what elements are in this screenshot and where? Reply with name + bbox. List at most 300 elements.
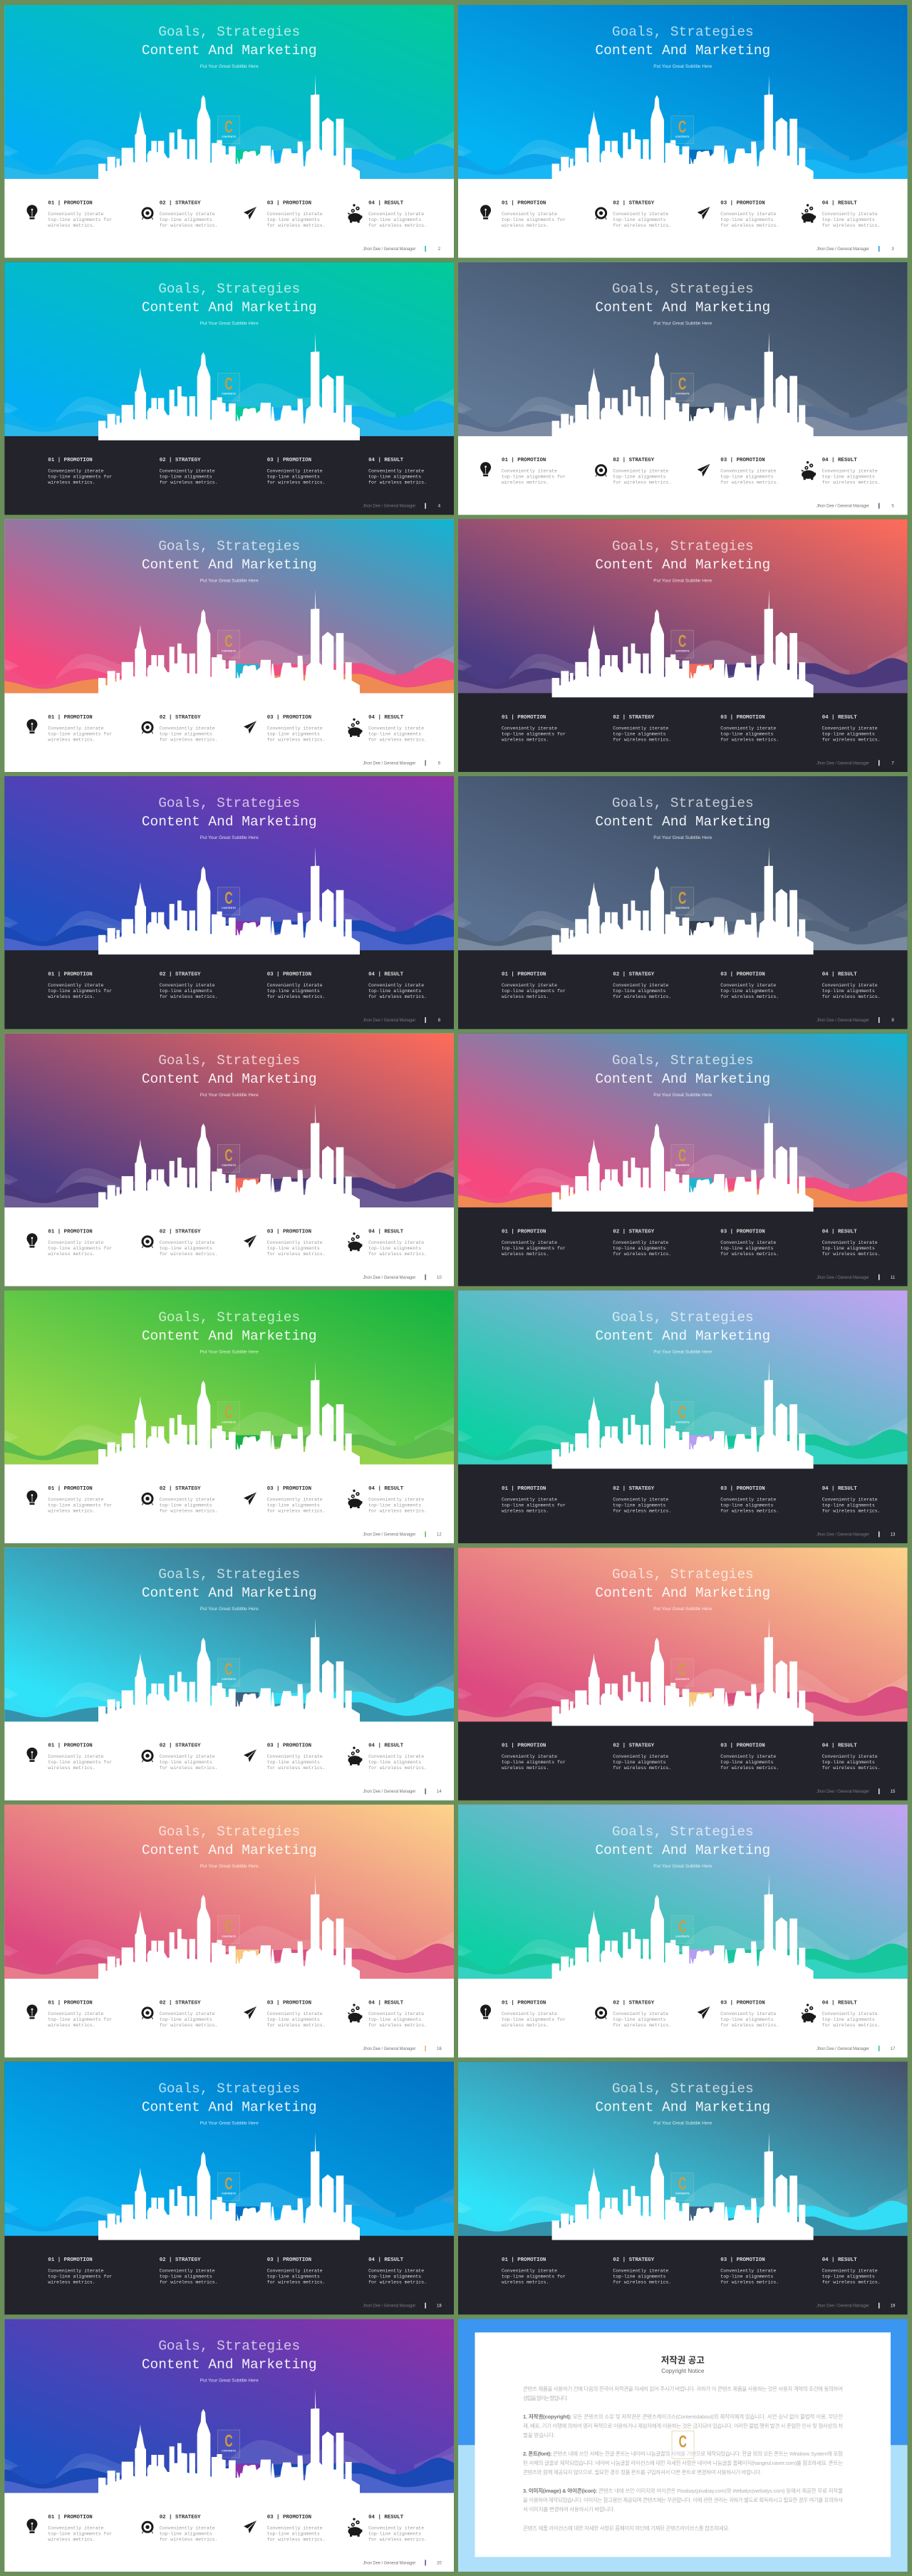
gradient background [458,262,908,436]
column 3: top-line alignments [267,731,320,736]
column 4 [348,1743,427,1771]
column 3 [244,1229,326,1257]
city skyline [552,846,814,954]
column 1 [48,972,112,999]
column 3: for wireless metrics. [720,1766,779,1771]
column 4 [348,2000,427,2028]
paragraph: image and icon [523,2487,843,2513]
column 4: Conveniently iterate [822,1754,878,1759]
footer [817,760,894,766]
logo badge: CONTENTS [675,907,690,910]
title: Content And Marketing [595,43,770,58]
column 1: 01 | PROMOTION [502,972,546,978]
column 1: 01 | PROMOTION [502,2000,546,2006]
column 1: 01 | PROMOTION [48,1486,93,1492]
column 2: 02 | STRATEGY [613,715,655,721]
column 4 [348,1486,427,1514]
column 4: top-line alignments [822,2017,875,2022]
column 2: 02 | STRATEGY [613,2257,655,2263]
title: Goals, Strategies [158,282,300,297]
title: Goals, Strategies [158,1053,300,1068]
column 3: for wireless metrics. [720,737,779,742]
column 1: 01 | PROMOTION [48,201,93,207]
column 4: top-line alignments [822,217,875,222]
column 2: Conveniently iterate [613,2011,668,2016]
paragraph: font: 콘텐츠와 함께 제공되지 않으므로, 필요한 경우 정품 폰트를 구입하셔서 다른 폰트로 변경하여 사용하시기 바랍니다. [523,2468,762,2475]
gradient background [4,2062,454,2236]
footer: 7 [891,761,894,766]
column 3: 03 | PROMOTION [267,2515,311,2520]
dark footer band [458,519,908,772]
gradient background [4,1547,454,1721]
column 1: 01 | PROMOTION [502,715,546,721]
logo badge [217,630,240,658]
column 1: 01 | PROMOTION [502,1743,546,1749]
column 3: for wireless metrics. [720,2023,779,2028]
column 1: Conveniently iterate [48,469,104,474]
logo badge [671,2173,693,2200]
column 3 [720,715,779,742]
logo badge [217,116,240,144]
footer: 12 [437,1532,442,1537]
column 3: for wireless metrics. [267,737,326,742]
column 4 [348,2515,427,2542]
city skyline [552,1875,814,1983]
column 2: Conveniently iterate [160,1754,215,1759]
waves [4,1926,454,1979]
footer [363,1788,442,1794]
column 2: top-line alignments [160,217,212,222]
column 4: for wireless metrics. [368,2280,427,2285]
title: Content And Marketing [142,1585,317,1601]
column 3: for wireless metrics. [267,1508,326,1514]
footer [363,1531,442,1537]
column 2: 02 | STRATEGY [160,2000,201,2006]
title [142,24,317,58]
column 4: top-line alignments [822,475,875,480]
column 4 [822,1229,881,1257]
column 3: Conveniently iterate [720,2269,776,2274]
logo badge: CONTENTS [222,1678,236,1681]
column 1: wireless metrics. [502,2280,549,2285]
city skyline [98,2389,360,2497]
footer: Jhon Dee / General Manager [363,2561,415,2565]
title: Content And Marketing [142,1071,317,1087]
column 3: for wireless metrics. [720,994,779,999]
column 4 [822,715,881,742]
column 1: wireless metrics. [502,737,549,742]
column 4: for wireless metrics. [822,1508,881,1514]
column 3: for wireless metrics. [267,2280,326,2285]
waves [458,2183,908,2236]
city skyline [98,332,360,441]
city skyline [552,1360,814,1468]
logo badge [217,1401,240,1429]
footer: 10 [437,1276,442,1280]
column 3: for wireless metrics. [720,1508,779,1514]
column 1: top-line alignments for [502,2274,566,2279]
logo badge: CONTENTS [675,1678,690,1681]
subtitle: Put Your Great Subtitle Here [653,1864,712,1869]
column 1 [502,715,566,742]
paragraph: font: 된 서체의 글꼴로 제작되었습니다. 네이버 나눔글꼴 라이선스에 대한 자세한 사항은 네이버 나눔글꼴 홈페이지(hangeul.naver.com)를 참조하세요. 폰트는 [523,2459,843,2466]
gradient background [4,5,454,179]
column 4: top-line alignments [822,1246,875,1251]
column 2 [613,2257,671,2285]
dark footer band [4,2062,454,2314]
logo badge: CONTENTS [675,2193,690,2195]
title: Goals, Strategies [612,1824,754,1840]
column 2 [142,1486,218,1514]
column 1 [502,972,566,999]
column 4: top-line alignments [368,2531,421,2536]
column 2: top-line alignments [613,731,666,736]
column 2: top-line alignments [613,217,666,222]
column 2: top-line alignments [160,989,212,994]
column 1 [48,2257,112,2285]
column 2 [160,2257,218,2285]
column 2: for wireless metrics. [160,2023,218,2028]
column 3 [720,972,779,999]
paragraph: copyright: 1. 저작권(copyright): 모든 콘텐츠의 소유 및 저작권은 콘텐츠케이크스(Contentslabout)의 제작자에게 있습니다. 사전 승낙 없이 불법적 이용, 무단전 [523,2413,843,2420]
footer: 4 [438,505,441,509]
column 1: wireless metrics. [502,480,549,485]
column 1: Conveniently iterate [48,2011,104,2016]
column 3: 03 | PROMOTION [720,1229,765,1235]
logo badge: C [224,890,233,908]
column 4: Conveniently iterate [368,1240,424,1245]
logo badge [671,373,693,401]
column 1: 01 | PROMOTION [48,458,93,463]
column 4: for wireless metrics. [368,994,427,999]
column 3: top-line alignments [267,989,320,994]
column 3 [244,1743,326,1771]
title: Goals, Strategies [158,24,300,40]
column 2: top-line alignments [613,2274,666,2279]
column 2: for wireless metrics. [613,994,671,999]
column 1: wireless metrics. [502,223,549,228]
logo badge: C [678,1403,687,1422]
column 2: Conveniently iterate [613,2269,668,2274]
column 4: for wireless metrics. [368,223,427,228]
subtitle: Put Your Great Subtitle Here [653,64,712,69]
city skyline [98,75,360,183]
column 1: wireless metrics. [48,1766,95,1771]
column 2: 02 | STRATEGY [160,458,201,463]
column 3: Conveniently iterate [267,726,323,731]
title: Content And Marketing [595,1329,770,1344]
title [142,282,317,316]
column 4: top-line alignments [822,989,875,994]
column 1: top-line alignments for [502,217,566,222]
column 1 [502,2257,566,2285]
column 4: for wireless metrics. [368,2023,427,2028]
column 3: Conveniently iterate [267,1497,323,1503]
column 1: top-line alignments for [48,1246,112,1251]
title: Goals, Strategies [612,24,754,40]
column 4: top-line alignments [368,475,421,480]
column 4: Conveniently iterate [822,1240,878,1245]
column 3: for wireless metrics. [720,1252,779,1257]
column 2: top-line alignments [160,475,212,480]
column 3 [720,1743,779,1771]
column 3: top-line alignments [267,2531,320,2536]
logo badge: C [224,2175,233,2194]
column 4: 04 | RESULT [822,2257,857,2263]
title: Content And Marketing [595,814,770,830]
light footer band [4,1290,454,1543]
light footer band [4,1805,454,2057]
column 1: Conveniently iterate [48,2269,104,2274]
column 1: wireless metrics. [48,2023,95,2028]
footer: 3 [891,247,894,252]
city skyline [552,2132,814,2240]
column 1: 01 | PROMOTION [502,1486,546,1492]
column 2: for wireless metrics. [160,994,218,999]
panel: slide 4 [4,262,454,515]
column 3 [244,201,326,228]
column 2: Conveniently iterate [160,2011,215,2016]
column 4 [822,1486,881,1514]
column 1: Conveniently iterate [48,2525,104,2530]
column 4: for wireless metrics. [822,2023,881,2028]
column 2: 02 | STRATEGY [160,201,201,207]
title: Content And Marketing [142,557,317,572]
panel: slide 11 [458,1034,908,1286]
footer: Jhon Dee / General Manager [363,505,415,509]
column 4: Conveniently iterate [822,726,878,731]
dark footer band [458,1034,908,1286]
column 1: top-line alignments for [502,731,566,736]
column 4 [802,2000,881,2028]
logo badge: CONTENTS [222,2449,236,2452]
column 2: Conveniently iterate [160,212,215,217]
footer: Jhon Dee / General Manager [363,1532,415,1537]
title [142,538,317,572]
column 3: top-line alignments [720,2274,774,2279]
column 2: 02 | STRATEGY [160,2515,201,2520]
footer: 11 [891,1276,896,1280]
column 2: top-line alignments [160,2274,212,2279]
column 2: top-line alignments [613,1760,666,1765]
logo badge: C [678,1147,687,1165]
column 2: Conveniently iterate [613,1497,668,1503]
column 4: Conveniently iterate [368,1497,424,1503]
column 4: 04 | RESULT [368,1743,404,1749]
column 1: top-line alignments for [48,989,112,994]
column 3: 03 | PROMOTION [267,1229,311,1235]
column 4: 04 | RESULT [822,972,857,978]
logo badge [671,887,693,915]
logo badge: C [224,1147,233,1165]
column 2: for wireless metrics. [160,1508,218,1514]
paragraph: copyright [523,2413,843,2438]
footer: 6 [438,761,441,766]
column 1 [502,1743,566,1771]
column 1: wireless metrics. [48,994,95,999]
column 3 [698,458,779,485]
paragraph: image and icon: 을 이용하여 제작되었습니다. 이미지는 참고용만 제공되며 콘텐츠에는 무관합니다. 이에 관한 권리는 귀하가 별도로 획득하시고 필요한 경우 여기를 유의하셔 [523,2496,843,2503]
waves [458,897,908,950]
column 4: 04 | RESULT [368,1229,404,1235]
column 2 [160,972,218,999]
column 4: 04 | RESULT [368,458,404,463]
column 2: 02 | STRATEGY [613,458,655,463]
title: Goals, Strategies [612,2081,754,2097]
footer: 20 [437,2561,442,2565]
footer [363,1274,442,1280]
column 2: top-line alignments [160,1246,212,1251]
column 1 [27,1743,112,1771]
column 2: for wireless metrics. [613,737,671,742]
logo badge [672,2431,694,2458]
column 2: for wireless metrics. [613,223,671,228]
city skyline [552,589,814,697]
column 4: top-line alignments [822,1503,875,1508]
gradient background [458,2062,908,2236]
column 4: top-line alignments [368,1246,421,1251]
column 4: Conveniently iterate [822,212,878,217]
title [595,24,770,58]
column 3: for wireless metrics. [267,1766,326,1771]
column 2: top-line alignments [613,989,666,994]
panel: slide 7 [458,519,908,772]
notice subheading: Copyright Notice [661,2368,705,2374]
column 4 [802,201,881,228]
logo badge [217,2430,240,2458]
column 2 [142,1229,218,1257]
city skyline [552,1617,814,1726]
column 4: Conveniently iterate [822,983,878,988]
column 2 [596,2000,671,2028]
logo badge: C [678,1918,687,1937]
column 2 [142,1743,218,1771]
light footer band [458,262,908,515]
city skyline [552,1103,814,1212]
column 2: Conveniently iterate [160,726,215,731]
light footer band [4,2319,454,2572]
city skyline [98,1103,360,1212]
logo badge: C [678,632,687,651]
footer [363,2560,442,2565]
waves [458,640,908,693]
column 2: for wireless metrics. [613,480,671,485]
logo badge: C [678,1661,687,1679]
logo badge: C [678,118,687,137]
panel: copyright notice [458,2319,908,2572]
subtitle: Put Your Great Subtitle Here [200,1864,259,1869]
title: Content And Marketing [595,1843,770,1858]
subtitle: Put Your Great Subtitle Here [200,578,259,583]
column 1: top-line alignments for [502,2017,566,2022]
column 2: top-line alignments [613,2017,666,2022]
column 2 [596,458,671,485]
footer: 8 [438,1019,441,1023]
logo badge: C [678,890,687,908]
paragraph: font: 2. 폰트(font): 콘텐츠 내에 쓰인 서체는 한글 폰트는 네이버 나눔글꼴의 서체를 기반으로 제작되었습니다. 한글 외의 모든 폰트는 Windows System에 포함 [523,2450,843,2457]
column 1: Conveniently iterate [502,1497,557,1503]
column 3: Conveniently iterate [720,1754,776,1759]
logo badge: CONTENTS [222,135,236,138]
column 4: top-line alignments [368,217,421,222]
column 1: Conveniently iterate [502,2269,557,2274]
waves [4,640,454,693]
column 3 [244,2515,326,2542]
column 1: top-line alignments for [502,1760,566,1765]
column 2: 02 | STRATEGY [160,1229,201,1235]
footer: 16 [437,2047,442,2051]
panel: slide 12 [4,1290,454,1543]
dark footer band [458,1547,908,1800]
logo badge [671,1401,693,1429]
column 3: 03 | PROMOTION [720,1486,765,1492]
column 3 [244,1486,326,1514]
column 2 [142,2515,218,2542]
title: Goals, Strategies [612,1310,754,1326]
column 2: Conveniently iterate [160,983,215,988]
column 2 [142,715,218,742]
title [142,1310,317,1344]
column 4: Conveniently iterate [368,2525,424,2530]
title: Content And Marketing [142,43,317,58]
gradient background [4,262,454,436]
dark footer band [4,776,454,1029]
column 2: Conveniently iterate [613,469,668,474]
column 1 [27,1229,112,1257]
subtitle: Put Your Great Subtitle Here [200,321,259,326]
column 1 [480,458,566,485]
column 3: top-line alignments [720,989,774,994]
footer: Jhon Dee / General Manager [817,1790,869,1794]
dark footer band [4,262,454,515]
waves [458,126,908,179]
two-tone background [458,2319,908,2572]
column 3: Conveniently iterate [720,2011,776,2016]
dark footer band [458,1290,908,1543]
column 3: Conveniently iterate [267,1240,323,1245]
column 2: for wireless metrics. [160,1252,218,1257]
column 4: Conveniently iterate [822,1497,878,1503]
column 4: 04 | RESULT [368,1486,404,1492]
title: Goals, Strategies [158,1310,300,1326]
panel: slide 15 [458,1547,908,1800]
column 4: 04 | RESULT [822,201,857,207]
intro paragraph [523,2385,843,2401]
column 2: 02 | STRATEGY [160,1486,201,1492]
city skyline [552,75,814,183]
column 3 [267,2257,326,2285]
column 1: wireless metrics. [48,1508,95,1514]
column 1: 01 | PROMOTION [48,715,93,721]
column 1: top-line alignments for [502,1246,566,1251]
column 2: Conveniently iterate [160,1240,215,1245]
logo badge [217,2173,240,2200]
column 1: 01 | PROMOTION [502,2257,546,2263]
column 1: top-line alignments for [502,989,566,994]
paragraph: copyright: 재, 배포, 기기 이행에 의하여 영리 목적으로 이용하거나 제삼자에게 이용하는 것은 금지되어 있습니다. 이러한 불법 행위 발견 시 준엄한 민사 및 형사상의 처 [523,2422,843,2429]
column 3: top-line alignments [267,1503,320,1508]
column 3: 03 | PROMOTION [720,715,765,721]
title: Content And Marketing [142,2356,317,2372]
subtitle: Put Your Great Subtitle Here [200,2121,259,2126]
title [595,1567,770,1601]
column 4: 04 | RESULT [822,1743,857,1749]
column 3: 03 | PROMOTION [267,715,311,721]
column 4: Conveniently iterate [368,726,424,731]
column 4 [822,2257,881,2285]
column 2 [613,972,671,999]
logo badge [217,1145,240,1172]
